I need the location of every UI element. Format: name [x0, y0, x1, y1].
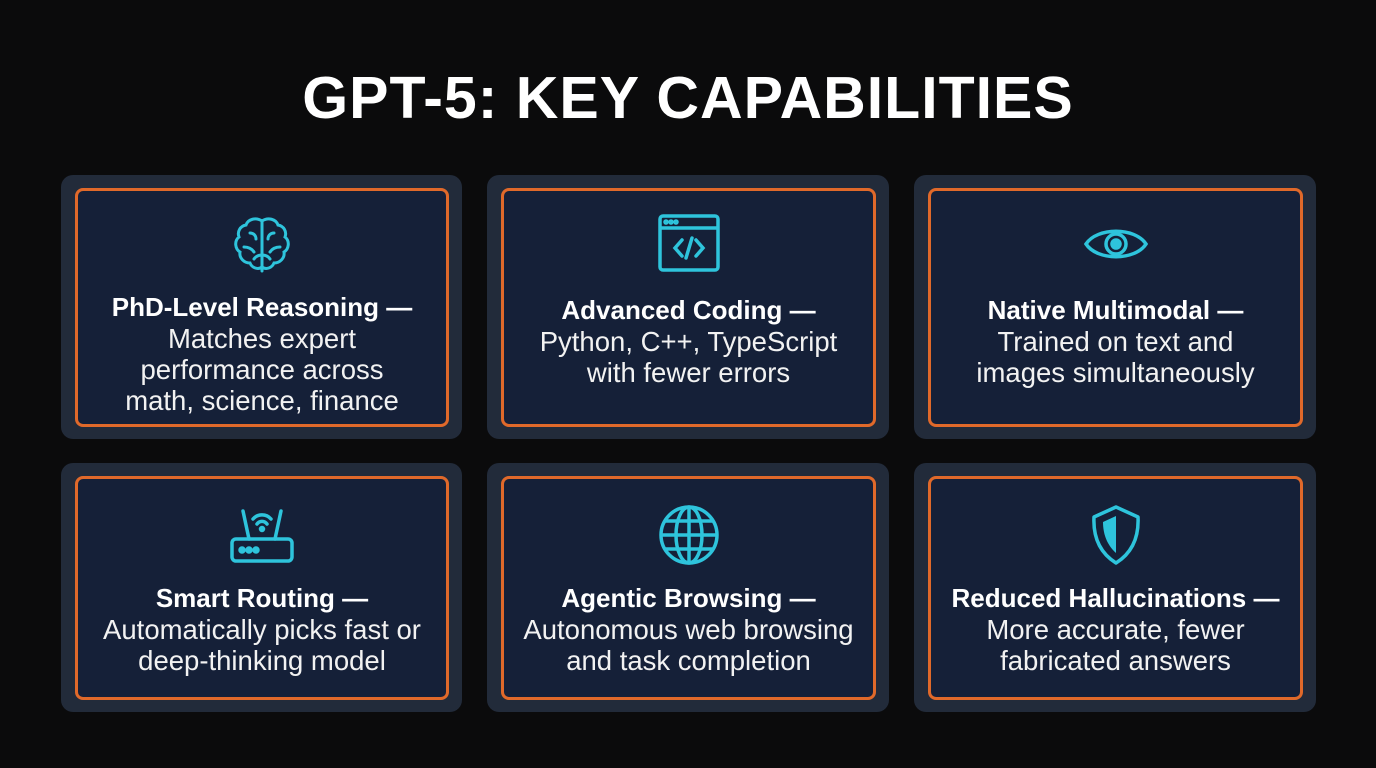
- icon: eye: [1084, 230, 1148, 258]
- text: More accurate, fewer: [986, 614, 1245, 645]
- icon: brain: [234, 217, 290, 272]
- text: [112, 292, 412, 416]
- text: and task completion: [566, 645, 811, 676]
- text: performance across: [140, 354, 384, 385]
- icon: router: [230, 509, 294, 563]
- text: fabricated answers: [1000, 645, 1231, 676]
- panel: Agentic Browsing: [487, 463, 889, 712]
- text: [976, 295, 1255, 388]
- text: Advanced Coding —: [561, 295, 816, 325]
- text: Trained on text and: [998, 326, 1233, 357]
- icon: shield: [1092, 505, 1140, 565]
- text: math, science, finance: [125, 385, 399, 416]
- panel: Native Multimodal: [914, 175, 1316, 439]
- panel: Reduced Hallucinations: [914, 463, 1316, 712]
- panel: PhD-Level Reasoning: [61, 175, 462, 439]
- text: Reduced Hallucinations —: [952, 583, 1279, 613]
- icon: globe: [659, 505, 719, 565]
- text: deep-thinking model: [138, 645, 386, 676]
- title: GPT-5: KEY CAPABILITIES: [302, 65, 1074, 131]
- text: [952, 583, 1280, 676]
- text: with fewer errors: [587, 357, 790, 388]
- text: Autonomous web browsing: [523, 614, 854, 645]
- icon: code window: [658, 214, 720, 272]
- text: Automatically picks fast or: [103, 614, 421, 645]
- text: [540, 295, 838, 388]
- panel: Smart Routing: [61, 463, 462, 712]
- text: Matches expert: [168, 323, 356, 354]
- text: Native Multimodal —: [988, 295, 1243, 325]
- text: [523, 583, 854, 676]
- text: Python, C++, TypeScript: [540, 326, 837, 357]
- panel: Advanced Coding: [487, 175, 889, 439]
- text: Smart Routing —: [156, 583, 368, 613]
- text: Agentic Browsing —: [561, 583, 816, 613]
- text: images simultaneously: [976, 357, 1255, 388]
- text: [103, 583, 421, 676]
- text: PhD-Level Reasoning —: [112, 292, 412, 322]
